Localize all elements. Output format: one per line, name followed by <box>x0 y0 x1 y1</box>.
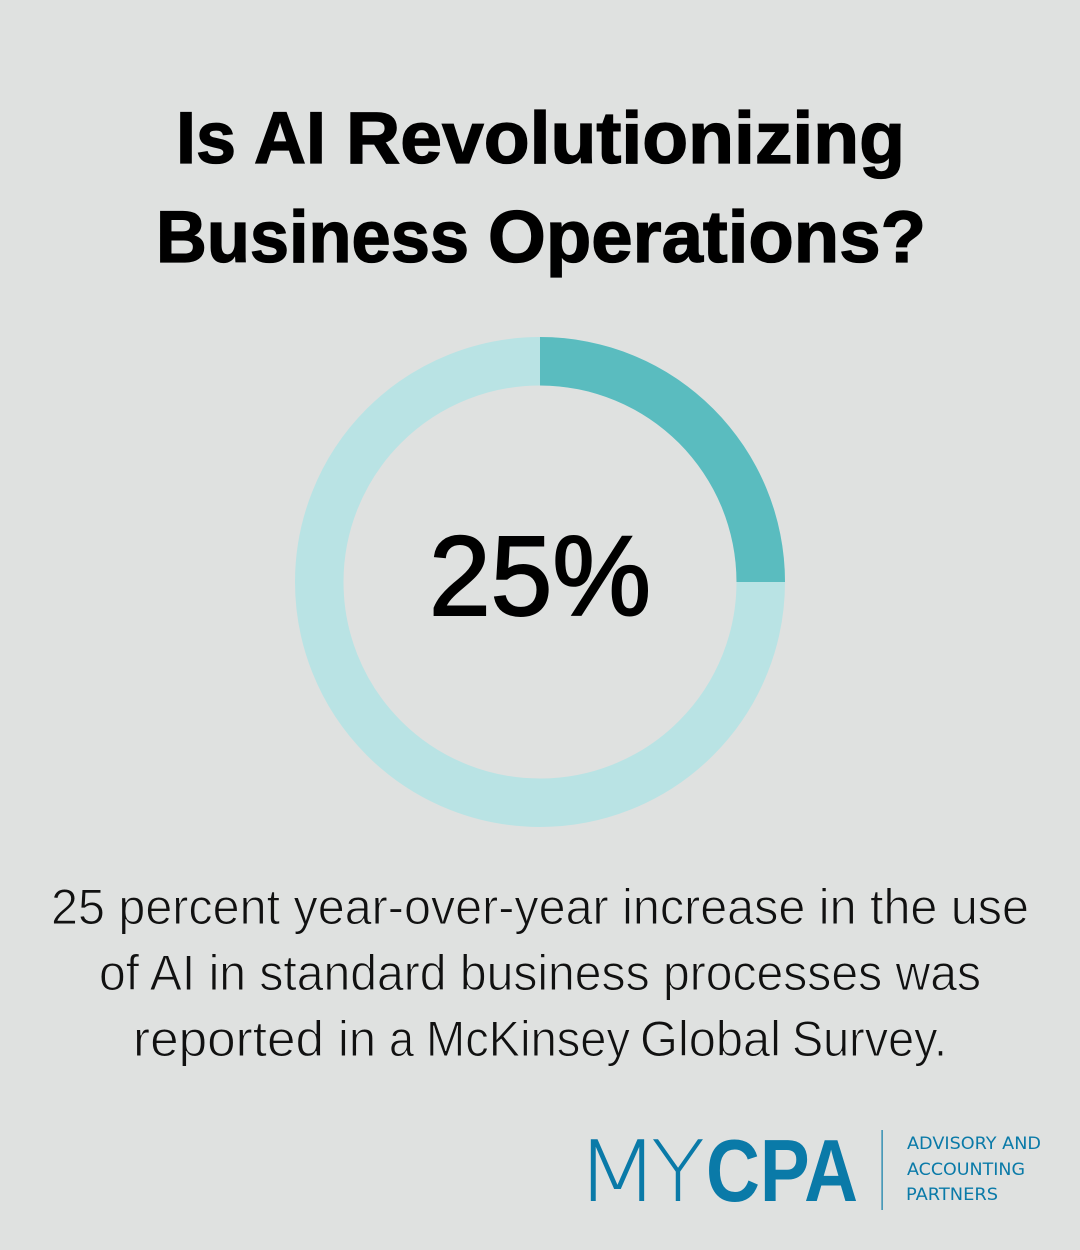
logo divider <box>882 1130 883 1210</box>
description text: 25 percent year-over-year increase in the use <box>51 879 1029 935</box>
title: Business <box>156 197 469 278</box>
title: Operations? <box>488 197 926 278</box>
logo: MYCPA <box>575 1121 1041 1222</box>
description text: Survey. <box>792 1011 947 1067</box>
title <box>156 98 926 278</box>
logo tagline: PARTNERS <box>906 1185 998 1204</box>
title: Is <box>176 98 236 179</box>
logo tagline <box>906 1134 1041 1204</box>
description text: of AI in standard business processes was <box>99 945 981 1001</box>
description text: reported <box>133 1011 324 1067</box>
description text: a <box>389 1011 414 1067</box>
logo wordmark CPA: CPA <box>706 1121 858 1220</box>
donut chart: 25 percent <box>319 337 785 803</box>
logo letter Y: Y <box>651 1123 705 1222</box>
description text <box>51 879 1029 1067</box>
description text: Global <box>640 1011 781 1067</box>
logo tagline: ACCOUNTING <box>907 1160 1025 1179</box>
description text: in <box>338 1011 376 1067</box>
donut centre value: 25% <box>429 513 651 639</box>
logo letter M: M <box>575 1123 660 1222</box>
description text: McKinsey <box>426 1011 630 1067</box>
logo tagline: ADVISORY AND <box>907 1134 1041 1153</box>
title: AI <box>254 98 326 179</box>
title: Revolutionizing <box>346 98 905 179</box>
